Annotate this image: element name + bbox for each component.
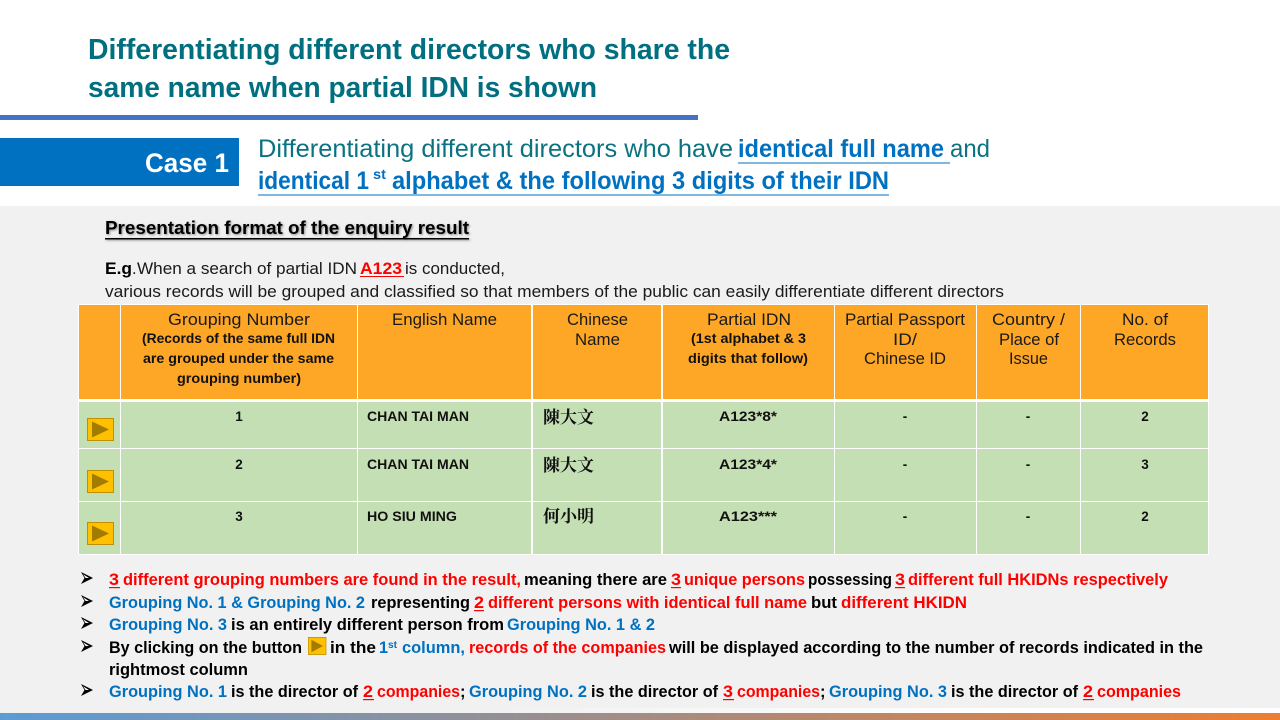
- example text: When a search of partial IDN: [137, 260, 357, 278]
- bullet 1: meaning there are: [524, 571, 667, 589]
- row 3: -: [903, 509, 907, 524]
- bullet 4: records of the companies: [469, 639, 666, 657]
- header labels: (1st alphabet & 3: [691, 331, 807, 346]
- header labels: digits that follow): [688, 351, 808, 366]
- bullet 5: companies: [377, 683, 460, 701]
- example text: is conducted,: [405, 260, 505, 278]
- section heading: Presentation format of the enquiry result: [105, 217, 469, 238]
- bullet 5: ;: [820, 683, 826, 701]
- row 1: 2: [1141, 409, 1149, 424]
- bullet 4: By clicking on the button: [109, 639, 302, 657]
- header labels: Partial Passport: [845, 310, 965, 329]
- case description: st: [373, 166, 386, 182]
- bullet 2: 2: [474, 594, 484, 612]
- bullet 5: companies: [737, 683, 820, 701]
- case description: and: [950, 135, 990, 163]
- title: same name when partial IDN is shown: [88, 72, 597, 104]
- header labels: are grouped under the same: [143, 351, 335, 366]
- bullet 5: 2: [1083, 683, 1093, 701]
- bullet 4: column,: [402, 639, 465, 657]
- row 2: -: [903, 457, 907, 472]
- bullet 4: 1: [379, 639, 388, 657]
- bullet 5: 2: [363, 683, 373, 701]
- row 1: CHAN TAI MAN: [367, 409, 469, 424]
- icon: play button: [308, 637, 326, 655]
- row 1: -: [903, 409, 907, 424]
- row 1: 1: [235, 409, 243, 424]
- header labels: Chinese ID: [864, 349, 946, 368]
- header labels: (Records of the same full IDN: [142, 331, 335, 346]
- header labels: Chinese: [567, 310, 628, 329]
- header labels: Grouping Number: [168, 310, 310, 329]
- row 2: -: [1026, 457, 1030, 472]
- row 2: CHAN TAI MAN: [367, 457, 469, 472]
- bullet 1: different full HKIDNs respectively: [908, 571, 1169, 589]
- bullet 5: Grouping No. 1: [109, 683, 227, 701]
- table header row: [79, 305, 1208, 399]
- title: Differentiating different directors who share the: [88, 34, 730, 66]
- bullet 5: 3: [723, 683, 733, 701]
- header labels: Partial IDN: [707, 310, 791, 329]
- bullet 2: but: [811, 594, 838, 612]
- row 2: A123*4*: [719, 457, 778, 472]
- case description: identical 1: [258, 167, 369, 195]
- case 1 label: Case 1: [145, 148, 229, 178]
- row 1: [79, 402, 1208, 448]
- header labels: Country /: [992, 310, 1065, 329]
- row 1: -: [1026, 409, 1030, 424]
- bullet 2: different persons with identical full name: [488, 594, 807, 612]
- case description: alphabet & the following 3 digits of their IDN: [392, 167, 889, 195]
- bullet 2: [81, 594, 967, 612]
- bullet 5: Grouping No. 3: [829, 683, 947, 701]
- bullet 4: [81, 637, 1203, 679]
- bullet 5: companies: [1097, 683, 1181, 701]
- row 2: 陳大文: [543, 456, 594, 475]
- bullet 3: Grouping No. 1 & 2: [507, 616, 655, 634]
- example text: .: [132, 260, 137, 278]
- findings list: [81, 571, 1203, 701]
- header labels: Issue: [1009, 349, 1048, 368]
- bullet 1: unique persons: [684, 571, 805, 589]
- header labels: Place of: [999, 330, 1059, 349]
- row 2: [79, 449, 1208, 501]
- example text: various records will be grouped and classified so that members of the public can easily differentiate different directors: [105, 283, 1004, 301]
- row 3: -: [1026, 509, 1030, 524]
- bullet 1: [81, 571, 1169, 589]
- bullet 2: different HKIDN: [841, 594, 967, 612]
- bullet 5: is the director of: [591, 683, 718, 701]
- bullet 1: 3: [109, 571, 119, 589]
- title rule: [0, 115, 698, 120]
- bullet 5: ;: [460, 683, 466, 701]
- row 1: 陳大文: [543, 408, 594, 427]
- row 3: HO SIU MING: [367, 509, 457, 524]
- row 3: A123***: [719, 509, 778, 524]
- bullet 3: Grouping No. 3: [109, 616, 227, 634]
- row 3: 3: [235, 509, 243, 524]
- footer gradient bar: [0, 713, 1280, 720]
- row 1: A123*8*: [719, 409, 778, 424]
- case description: identical full name: [738, 135, 944, 163]
- page background panel: [0, 206, 1280, 713]
- bullet 5: [81, 683, 1181, 701]
- bullet 1: 3: [895, 571, 905, 589]
- row 2: 2: [235, 457, 243, 472]
- header labels: English Name: [392, 310, 497, 329]
- case 1 label: [0, 138, 239, 186]
- row 3: [79, 502, 1208, 554]
- bullet 1: 3: [671, 571, 681, 589]
- bullet 4: in the: [330, 639, 376, 657]
- bullet 4: rightmost column: [109, 661, 248, 679]
- bullet 2: representing: [371, 594, 470, 612]
- header labels: No. of: [1122, 310, 1168, 329]
- case description: [258, 135, 990, 196]
- row 2: 3: [1141, 457, 1149, 472]
- bullet 4: st: [388, 640, 398, 651]
- bullet 4: will be displayed according to the number of records indicated in the: [668, 639, 1203, 657]
- header labels: ID/: [893, 330, 917, 349]
- results table: [78, 304, 1209, 555]
- example text: [105, 260, 1004, 301]
- bullet 3: is an entirely different person from: [231, 616, 504, 634]
- bullet 1: different grouping numbers are found in the result,: [123, 571, 521, 589]
- bullet 1: possessing: [808, 571, 892, 589]
- case description: Differentiating different directors who have: [258, 135, 733, 163]
- bullet 2: Grouping No. 1 & Grouping No. 2: [109, 594, 365, 612]
- bullet 5: is the director of: [951, 683, 1078, 701]
- row 3: 2: [1141, 509, 1149, 524]
- header labels: grouping number): [177, 371, 301, 386]
- header labels: Records: [1114, 330, 1176, 349]
- header labels: Name: [575, 330, 620, 349]
- bullet 3: [81, 616, 655, 634]
- bullet 5: Grouping No. 2: [469, 683, 587, 701]
- example text: A123: [360, 260, 402, 278]
- header labels: [142, 310, 1176, 386]
- row 3: 何小明: [543, 507, 594, 526]
- title: [88, 34, 730, 104]
- bullet 5: is the director of: [231, 683, 358, 701]
- example text: E.g: [105, 260, 132, 278]
